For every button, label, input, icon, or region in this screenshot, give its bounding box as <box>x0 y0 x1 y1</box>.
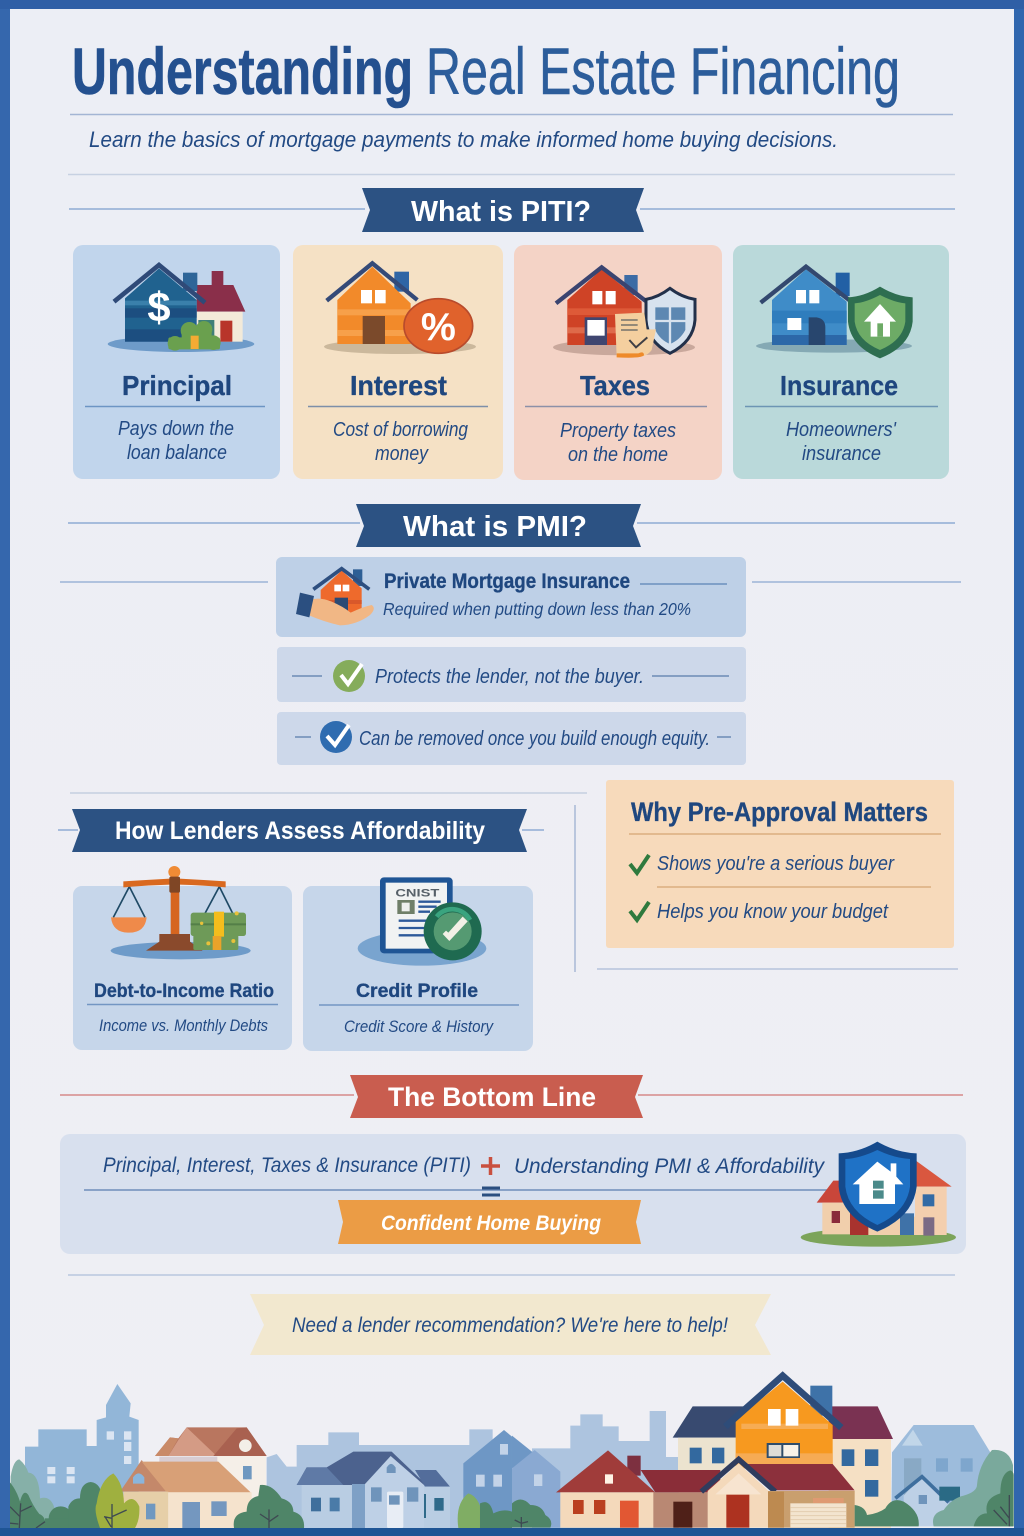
heading: What is PITI?: What is PITI? <box>411 196 591 228</box>
title: Understanding <box>72 34 413 108</box>
icon: blue house with green shield <box>756 267 913 358</box>
card title: Debt-to-Income Ratio <box>94 980 274 1002</box>
trees <box>512 1500 919 1528</box>
icon: blue house with dollar: $ <box>147 284 171 331</box>
icon: equals <box>482 1188 500 1195</box>
ribbon: Confident Home Buying <box>338 1200 641 1244</box>
heading: What is PMI? <box>68 504 955 547</box>
panel: Taxes <box>514 245 722 480</box>
card description: Homeowners' <box>786 419 897 441</box>
pmi title: Private Mortgage Insurance <box>384 570 630 593</box>
illustration: neighborhood left <box>3 1384 512 1530</box>
card description: money <box>375 443 429 465</box>
card description <box>560 420 676 466</box>
trees <box>3 1476 304 1530</box>
card description: Credit Score & History <box>344 1017 494 1036</box>
callout: lender recommendation <box>250 1294 771 1355</box>
icon: scales and money <box>111 866 251 959</box>
panel: Debt-to-Income Ratio <box>73 866 292 1050</box>
panel: can be removed: Can be removed once you build enough equity. <box>359 728 710 750</box>
card title: Principal <box>122 370 232 401</box>
icon: check <box>630 855 649 873</box>
card description: Pays down the <box>118 418 234 440</box>
card title: Taxes <box>580 370 650 401</box>
card title: Interest <box>350 370 447 401</box>
panel: protects the lender: Protects the lender, not the buyer. <box>375 666 644 688</box>
card description: Income vs. Monthly Debts <box>99 1016 268 1035</box>
icon: house and shield <box>801 1142 956 1247</box>
heading: How Lenders Assess Affordability <box>58 809 544 852</box>
panel: Why Pre-Approval Matters: Helps you know your budget <box>657 901 889 923</box>
icon: orange house with percent: % <box>421 305 456 349</box>
front house <box>120 1460 252 1528</box>
card description: insurance <box>802 443 881 465</box>
title <box>72 34 900 108</box>
icon: orange house with percent <box>324 263 476 354</box>
heading: What is PMI?: What is PMI? <box>403 511 587 543</box>
panel: bottom line equation: Understanding PMI & Affordability <box>514 1155 825 1178</box>
card description <box>786 419 897 465</box>
icon: credit report with check <box>358 877 486 966</box>
back house <box>155 1427 267 1528</box>
card description: Cost of borrowing <box>333 419 468 441</box>
card description: loan balance <box>127 442 227 464</box>
heading: The Bottom Line: The Bottom Line <box>388 1082 596 1112</box>
card description <box>333 419 468 465</box>
panel: can be removed <box>277 712 746 765</box>
panel title: Why Pre-Approval Matters <box>631 797 928 827</box>
panel: Insurance <box>733 245 949 479</box>
heading: How Lenders Assess Affordability: How Lenders Assess Affordability <box>115 817 485 845</box>
card description: Property taxes <box>560 420 676 442</box>
icon: blue check <box>320 721 352 753</box>
panel: bottom line equation: Principal, Interest, Taxes & Insurance (PITI) <box>103 1154 471 1177</box>
panel: Credit Profile <box>303 877 533 1051</box>
subtitle: Learn the basics of mortgage payments to make informed home buying decisions. <box>89 127 838 152</box>
panel: Principal <box>73 245 280 479</box>
icon: red house with document and shield <box>553 267 695 358</box>
icon: check <box>630 902 649 920</box>
illustration: neighborhood right <box>512 1376 1014 1529</box>
panel: Interest <box>293 245 503 479</box>
card title: Credit Profile <box>356 980 478 1002</box>
heading: The Bottom Line <box>60 1075 963 1118</box>
panel: protects the lender <box>277 647 746 702</box>
icon: credit report with check: CNIST <box>395 888 439 900</box>
pmi description: Required when putting down less than 20% <box>383 599 691 619</box>
card title: Insurance <box>780 370 898 401</box>
card description: on the home <box>568 444 668 466</box>
panel: Private Mortgage Insurance <box>60 557 961 637</box>
panel: bottom line equation <box>60 1134 966 1254</box>
card description <box>118 418 234 464</box>
callout: lender recommendation: Need a lender recommendation? We're here to help! <box>292 1314 728 1337</box>
icon: green check <box>333 660 365 692</box>
icon: plus <box>481 1157 500 1175</box>
large house <box>673 1376 893 1529</box>
icon: blue house with dollar <box>108 265 254 352</box>
panel: Why Pre-Approval Matters <box>606 780 954 948</box>
front houses <box>556 1450 855 1528</box>
ribbon: Confident Home Buying: Confident Home Buying <box>381 1212 601 1235</box>
house blue <box>297 1452 450 1528</box>
panel: Why Pre-Approval Matters: Shows you're a serious buyer <box>657 853 895 875</box>
heading: What is PITI? <box>69 188 955 232</box>
icon: hand holding house <box>296 569 374 625</box>
